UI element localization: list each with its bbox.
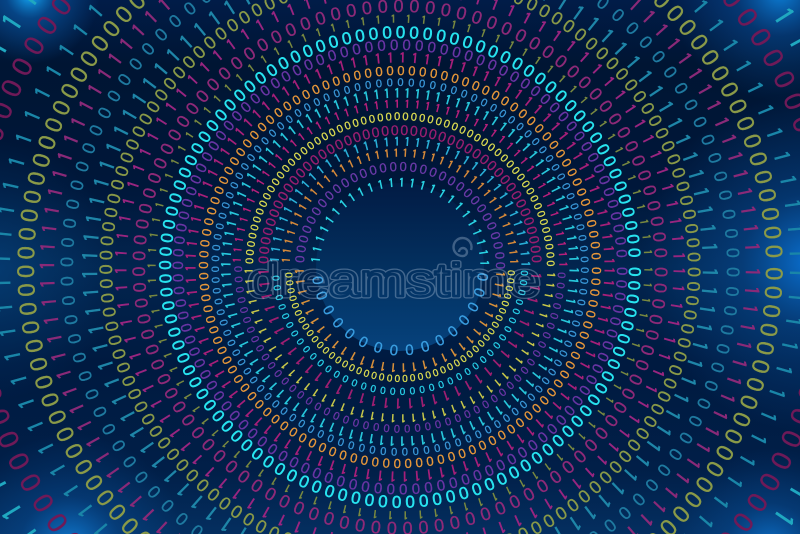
watermark: [247, 236, 540, 300]
lower inner rings: [234, 266, 566, 433]
central dark circle: [316, 183, 484, 351]
upper inner rings: [232, 100, 568, 269]
watermark word outline: [247, 260, 540, 300]
ring: blue zeros: 00000000000000000000000000000000000000000000000000000000000000000000000000000000000000000000000000000000000000000000000000000000: [211, 78, 589, 456]
watermark spiral icon: [454, 238, 472, 256]
ring: olive small ones: 1111111111111111111111111111111111111111111111111111111111111111111111111111111111111111111111111111111111111111: [147, 14, 653, 520]
lower ring: cyan zeros: 0000000000000000000000000000000000000000000000000000000000000000000000: [272, 270, 528, 396]
lower ring: yellow zeros: 0000000000000000000000000000000000000000000000000000000000000000000000: [285, 270, 515, 382]
lower ring: yellow ones: 1111111111111111111111111111111111111111111111111111111111111111111111: [244, 270, 556, 422]
lower ring: purple zeros: 0000000000000000000000000000000000000000000000000000000000000000000000: [234, 266, 566, 433]
